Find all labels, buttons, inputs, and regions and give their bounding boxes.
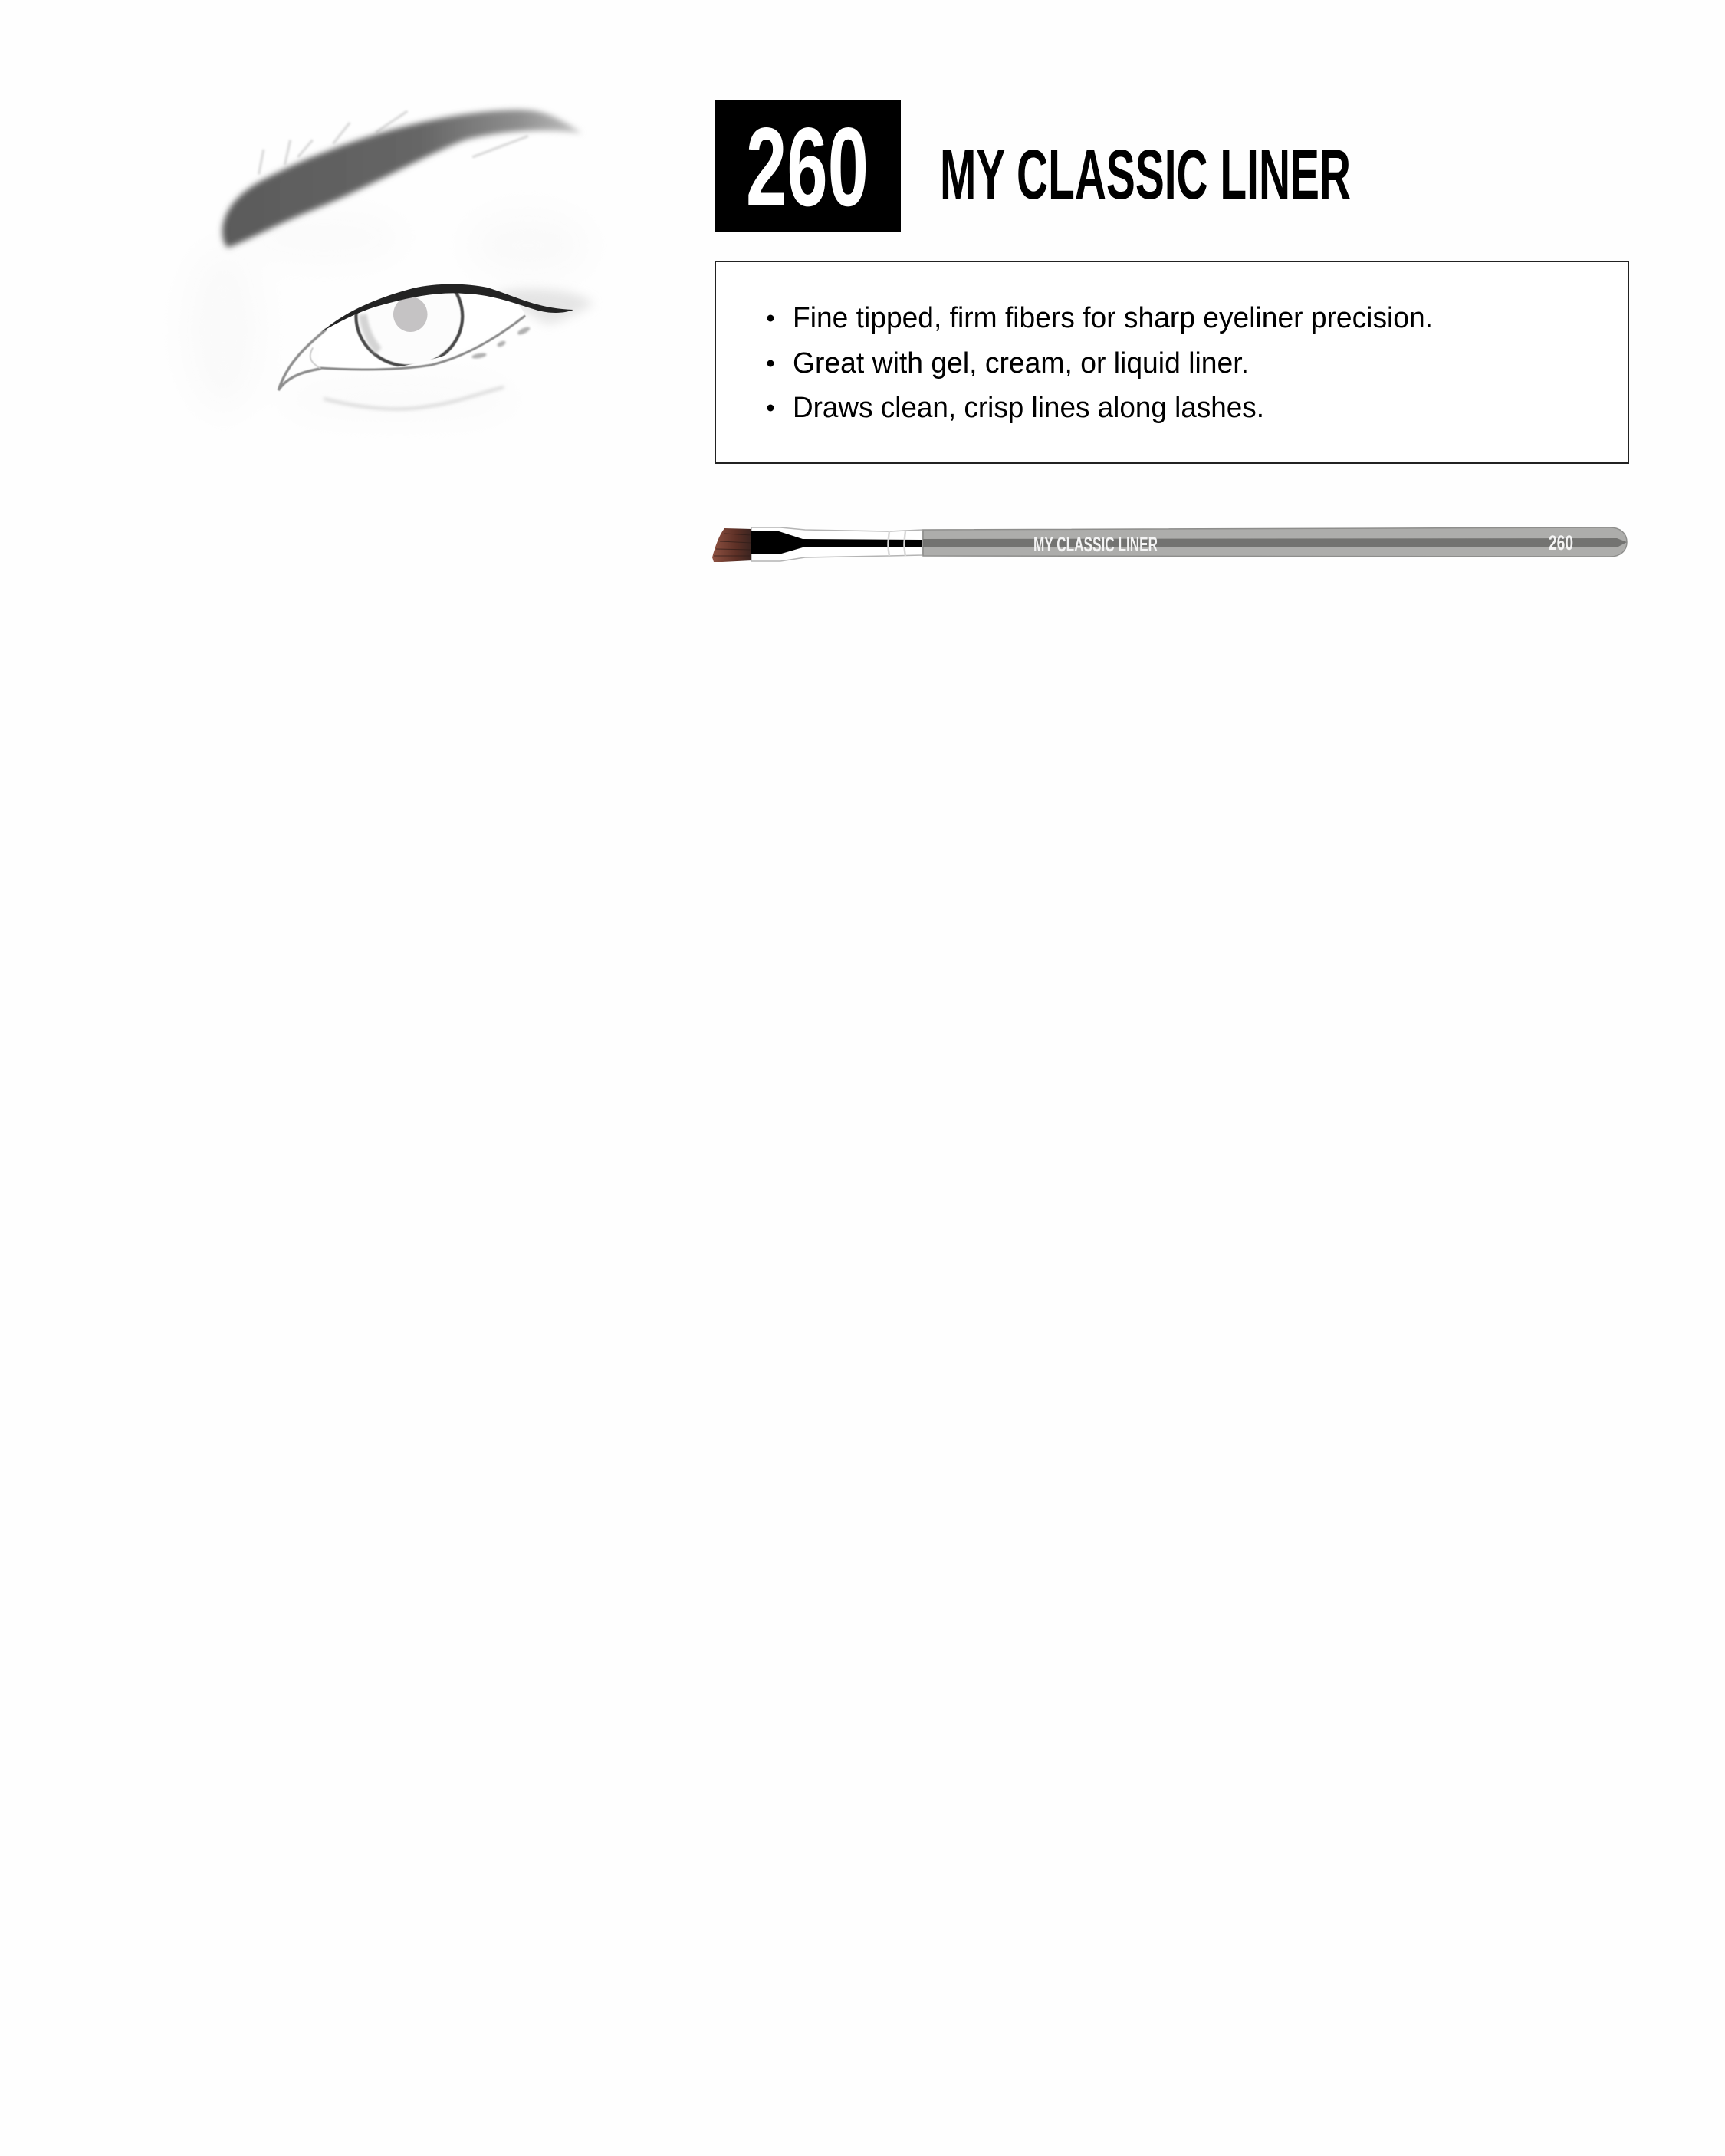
outer eye shadow [495, 289, 593, 324]
handle number: 260 [1549, 531, 1573, 554]
eyebrow [222, 110, 582, 248]
brush ferrule [751, 527, 922, 561]
brush [712, 527, 1627, 562]
feature 1: Fine tipped, firm fibers for sharp eyeliner precision. [793, 302, 1433, 334]
brush bristles [712, 528, 752, 562]
number badge [715, 100, 901, 232]
feature 2: Great with gel, cream, or liquid liner. [793, 347, 1249, 380]
illustration: eye with winged liner [182, 110, 593, 418]
brush handle [923, 527, 1627, 557]
liner [322, 284, 573, 331]
panel: features [715, 261, 1628, 463]
face shading [182, 211, 591, 418]
under eye crease [324, 387, 504, 409]
eyeball and iris [354, 293, 524, 366]
lower lid and inner corner [278, 316, 524, 390]
handle name: MY CLASSIC LINER [1033, 533, 1158, 556]
title: MY CLASSIC LINER [940, 136, 1351, 214]
feature 3: Draws clean, crisp lines along lashes. [793, 392, 1264, 424]
number badge: 260 [746, 104, 869, 229]
waterline marks [472, 326, 531, 360]
